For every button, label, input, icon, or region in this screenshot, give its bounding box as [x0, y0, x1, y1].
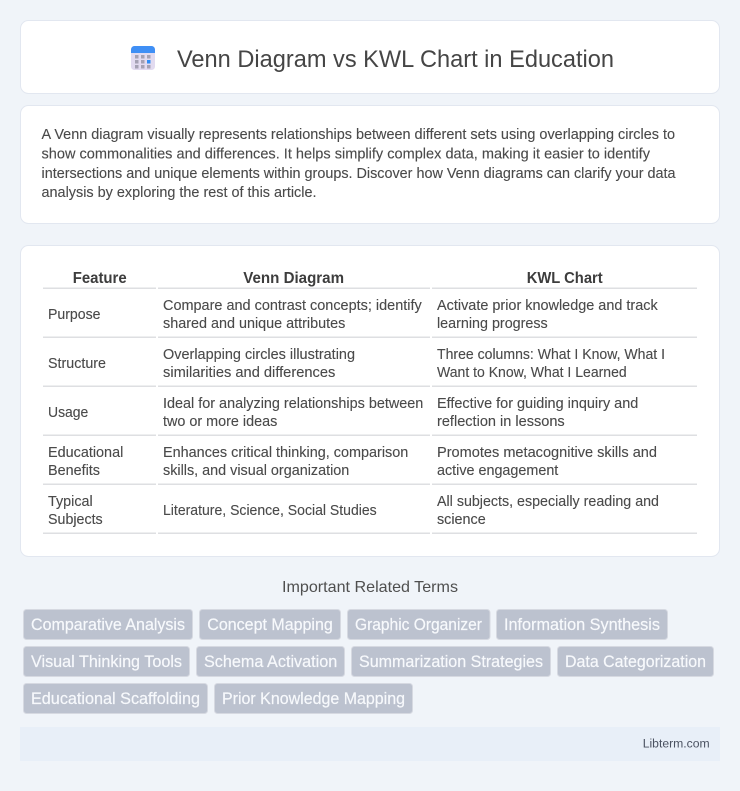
row: usage	[48, 396, 638, 430]
table header row: Feature	[73, 270, 127, 287]
row: structure: similarities and differences	[163, 365, 335, 381]
intro text: analysis by exploring the rest of this article.	[42, 185, 316, 201]
row: structure	[48, 347, 665, 381]
row: educational benefits: Promotes metacognitive skills and	[437, 445, 657, 461]
row: usage: two or more ideas	[163, 414, 277, 430]
row: typical subjects: All subjects, especially reading and	[437, 494, 659, 510]
row: usage: Usage	[48, 405, 88, 421]
row: educational benefits: Benefits	[48, 463, 100, 479]
tag: comparative analysis	[24, 610, 192, 640]
row: structure: Three columns: What I Know, What I	[437, 347, 665, 363]
row: educational benefits: active engagement	[437, 463, 558, 479]
tag: prior knowledge mapping: Prior Knowledge Mapping	[222, 690, 405, 708]
row: purpose	[48, 298, 658, 332]
tag: data categorization: Data Categorization	[565, 653, 706, 671]
tag: summarization strategies	[352, 646, 550, 676]
tag: schema activation: Schema Activation	[204, 653, 337, 671]
heading: important related terms: Important Related Terms	[282, 579, 458, 596]
row: purpose: learning progress	[437, 316, 548, 332]
row: usage: Effective for guiding inquiry and	[437, 396, 638, 412]
tag list	[24, 610, 714, 714]
row: purpose: Compare and contrast concepts; identify	[163, 298, 422, 314]
footer	[20, 727, 720, 761]
row: educational benefits: Enhances critical thinking, comparison	[163, 445, 408, 461]
row: usage: Ideal for analyzing relationships between	[163, 396, 423, 412]
row: structure: Want to Know, What I Learned	[437, 365, 627, 381]
row: usage: reflection in lessons	[437, 414, 565, 430]
tag: visual thinking tools	[24, 646, 190, 676]
row: typical subjects: Subjects	[48, 512, 103, 528]
intro text: show commonalities and differences. It helps simplify complex data, making it easier to identify	[42, 146, 651, 162]
tag: concept mapping: Concept Mapping	[207, 616, 333, 634]
tag: data categorization	[558, 646, 714, 676]
title: Venn Diagram vs KWL Chart in Education	[177, 46, 614, 73]
row: educational benefits: skills, and visual organization	[163, 463, 349, 479]
row: structure: Structure	[48, 356, 106, 372]
icon: calendar grid	[131, 46, 155, 70]
panel: header	[20, 20, 720, 94]
table header row: Venn Diagram	[243, 270, 344, 287]
tag: prior knowledge mapping	[214, 684, 412, 714]
intro text: intersections and unique elements within groups. Discover how Venn diagrams can clarify your data	[42, 166, 676, 182]
tag: information synthesis: Information Synthesis	[504, 616, 660, 634]
panel: comparison table	[20, 246, 720, 556]
tag: summarization strategies: Summarization Strategies	[359, 653, 543, 671]
row: typical subjects: Literature, Science, Social Studies	[163, 503, 377, 519]
row: typical subjects	[48, 494, 659, 528]
tag: information synthesis	[496, 610, 668, 640]
panel: introduction	[20, 106, 720, 224]
tag: graphic organizer	[348, 610, 490, 640]
intro text: A Venn diagram visually represents relationships between different sets using overlapping circles to	[42, 127, 675, 143]
footer credit: Libterm.com	[643, 737, 710, 751]
tag: visual thinking tools: Visual Thinking Tools	[31, 653, 182, 671]
row: purpose: shared and unique attributes	[163, 316, 345, 332]
table header row	[73, 270, 603, 287]
row: educational benefits	[48, 445, 657, 479]
tag: concept mapping	[200, 610, 340, 640]
row: typical subjects: science	[437, 512, 486, 528]
row: structure: Overlapping circles illustrating	[163, 347, 355, 363]
tag: educational scaffolding: Educational Scaffolding	[31, 690, 200, 708]
row: educational benefits: Educational	[48, 445, 123, 461]
row: typical subjects: Typical	[48, 494, 93, 510]
intro text	[42, 127, 676, 201]
table header row: KWL Chart	[527, 270, 603, 287]
tag: graphic organizer: Graphic Organizer	[355, 616, 483, 634]
tag: educational scaffolding	[24, 684, 208, 714]
row: purpose: Activate prior knowledge and track	[437, 298, 658, 314]
row: purpose: Purpose	[48, 307, 100, 323]
tag: schema activation	[196, 646, 344, 676]
tag: comparative analysis: Comparative Analysis	[31, 616, 185, 634]
